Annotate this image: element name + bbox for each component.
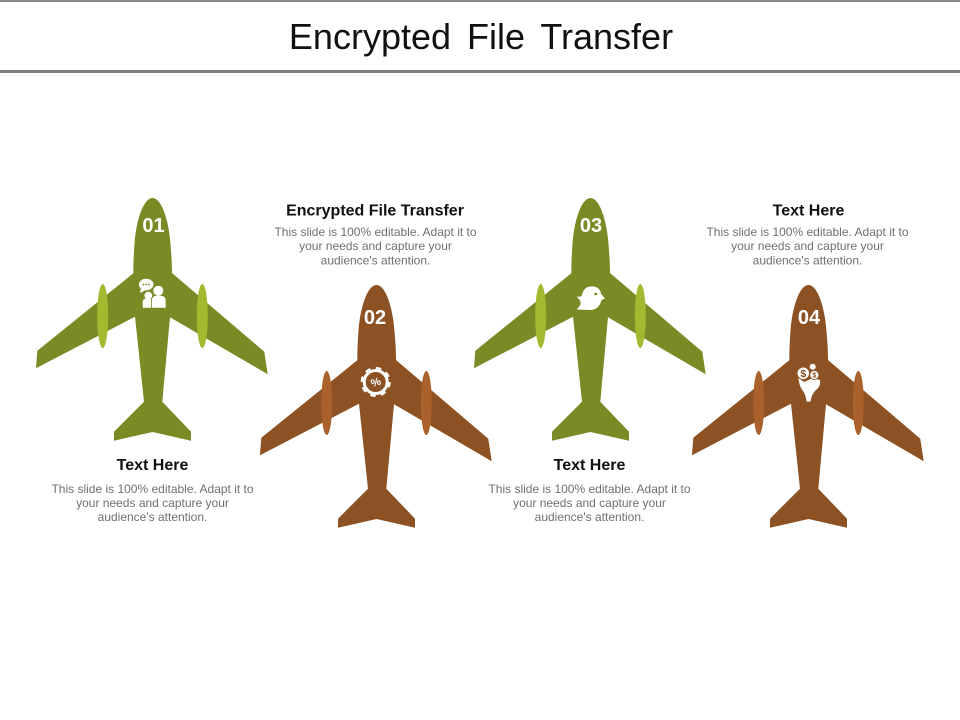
text block: 03: your needs and capture your [513,496,666,510]
text block: 04 [706,202,909,268]
icon: people talking [139,279,166,308]
plane 03 [474,198,706,441]
engines 01 [97,284,208,348]
text block: 03: audience's attention. [535,510,644,524]
plane 04 [692,285,924,528]
engines 03 [535,284,646,348]
text block: 01 [51,457,254,524]
plane 01 [36,198,268,441]
number 01: 01 [142,215,165,237]
text block: 02 [274,202,477,268]
engines 04 [753,371,864,435]
text block: 03 [488,457,691,524]
text block: 01: audience's attention. [98,510,207,524]
text block: 01: Text Here [117,457,188,474]
text block: 02: your needs and capture your [299,239,452,253]
engines 02 [321,371,432,435]
icon: money funnel: $ [800,368,806,380]
plane body 02 [260,285,492,528]
text block: 03: Text Here [554,457,625,474]
plane body 01 [36,198,268,441]
text block: 04: This slide is 100% editable. Adapt it to [706,225,909,239]
text block: 03: This slide is 100% editable. Adapt it to [488,482,691,496]
text block: 01: This slide is 100% editable. Adapt it to [51,482,254,496]
text block: 04: audience's attention. [753,254,862,268]
text block: 02: audience's attention. [321,254,430,268]
plane body 03 [474,198,706,441]
number 02: 02 [364,307,386,329]
icon: money funnel: $ [812,372,816,380]
icon: percent gear [362,368,390,396]
plane body 04 [692,285,924,528]
number 04: 04 [798,307,821,329]
text block: 04: Text Here [773,202,844,220]
text block: 01: your needs and capture your [76,496,229,510]
text block: 04: your needs and capture your [731,239,884,253]
plane 02 [260,285,492,528]
icon: percent gear: % [369,376,383,390]
title: Encrypted File Transfer [289,16,673,57]
icon: bird [576,286,605,310]
text block: 02: Encrypted File Transfer [286,202,464,220]
text block: 02: This slide is 100% editable. Adapt it to [274,225,477,239]
icon: money funnel [797,364,820,402]
number 03: 03 [580,215,602,237]
